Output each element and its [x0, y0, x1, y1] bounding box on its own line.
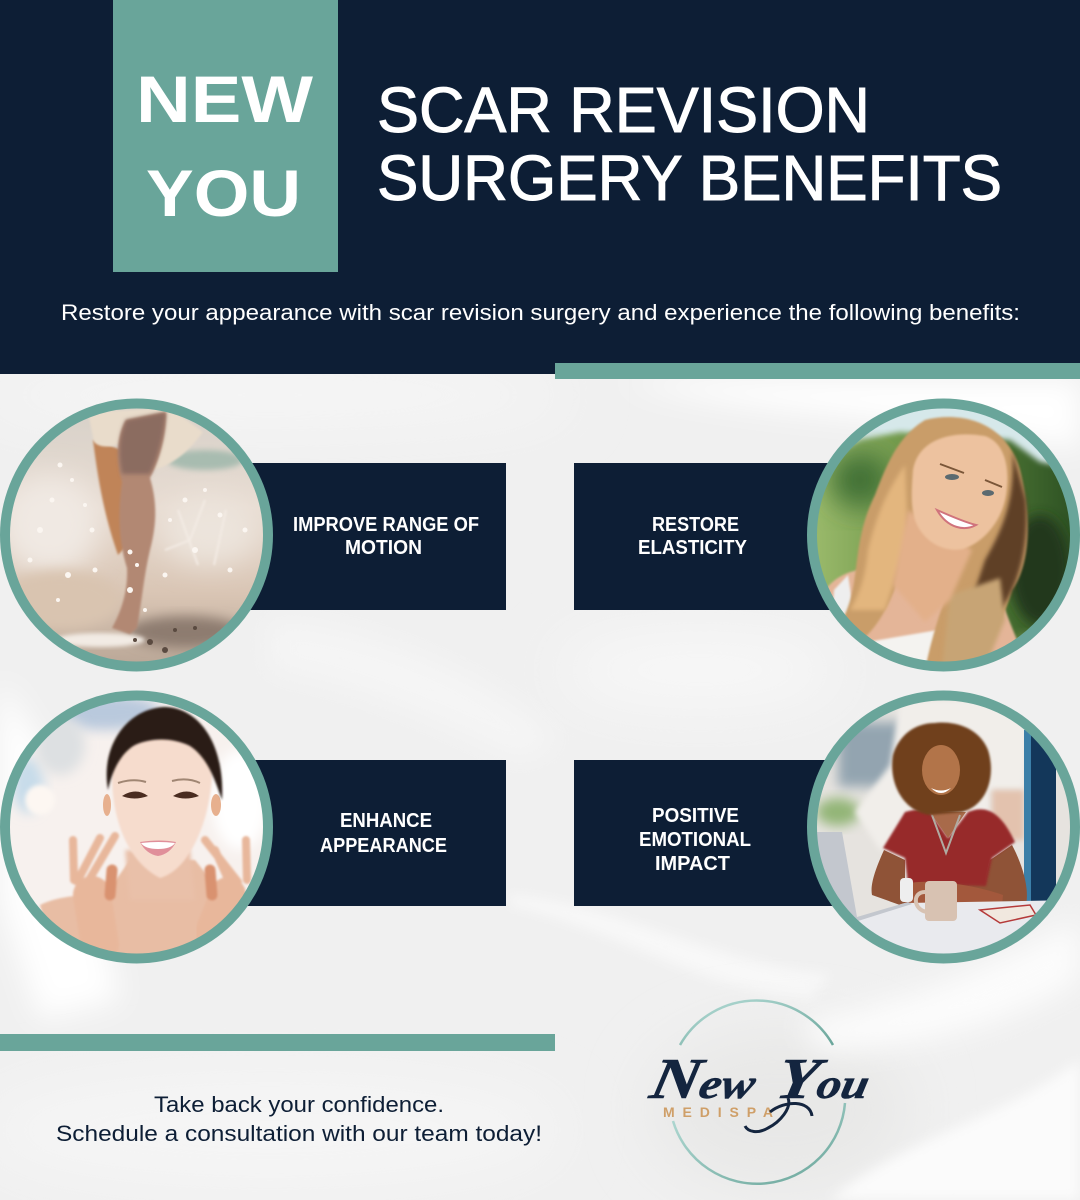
- face: [912, 434, 1007, 550]
- brand box: [113, 0, 338, 272]
- hair mass: [842, 417, 1028, 672]
- call to action text: Schedule a consultation with our team today!: [56, 1121, 542, 1146]
- notebook: [980, 905, 1036, 923]
- silk background: [0, 365, 1080, 1200]
- call to action text: [56, 1092, 542, 1146]
- hair: [107, 707, 222, 800]
- panel: restore elasticity: ELASTICITY: [638, 537, 748, 559]
- curly hair: [892, 723, 991, 815]
- photo: legs splashing on beach: [0, 400, 274, 670]
- call to action text: Take back your confidence.: [154, 1092, 444, 1117]
- arms: [872, 845, 1027, 905]
- panel: positive emotional impact: IMPACT: [655, 853, 730, 875]
- panel: enhance appearance: [240, 760, 506, 906]
- photo: smiling woman with long blonde hair: [810, 400, 1080, 672]
- logo: New You Medispa: New: [644, 1047, 764, 1111]
- laptop: [817, 832, 912, 922]
- brand box: YOU: [146, 156, 301, 230]
- shoulders and chest: [828, 570, 1018, 654]
- panel: enhance appearance: ENHANCE: [340, 810, 432, 832]
- face: [112, 738, 212, 878]
- dress: [90, 409, 202, 466]
- panel: positive emotional impact: POSITIVE: [652, 805, 739, 827]
- neck: [893, 510, 972, 622]
- panel: improve range of motion: MOTION: [345, 537, 422, 559]
- bottom accent bar: [0, 1034, 555, 1051]
- panel: restore elasticity: RESTORE: [652, 514, 739, 536]
- title: [377, 74, 1002, 214]
- back leg: [92, 440, 124, 556]
- panel: enhance appearance: APPEARANCE: [320, 835, 447, 857]
- brand box: NEW: [136, 62, 314, 136]
- header band: [0, 0, 1080, 374]
- photo: woman touching her face: [0, 690, 274, 975]
- right hand: [205, 840, 247, 940]
- top accent bar: [555, 363, 1080, 379]
- table: [859, 900, 1046, 954]
- panel: positive emotional impact: EMOTIONAL: [639, 829, 751, 851]
- title: SCAR REVISION: [377, 74, 870, 146]
- left hand: [73, 836, 115, 945]
- hands: [905, 882, 1003, 903]
- neck: [123, 848, 194, 866]
- panel: positive emotional impact: [574, 760, 840, 906]
- logo: New You Medispa: [644, 1000, 877, 1184]
- shoulders: [39, 858, 208, 954]
- photo: woman at a desk with coffee: [810, 690, 1080, 970]
- panel: improve range of motion: [240, 463, 506, 610]
- white top: [832, 574, 852, 615]
- panel: improve range of motion: IMPROVE RANGE OF: [293, 514, 479, 536]
- panel: restore elasticity: [574, 463, 840, 610]
- logo: New You Medispa: MEDISPA: [663, 1104, 773, 1120]
- front leg: [112, 412, 166, 634]
- logo: New You Medispa: You: [771, 1047, 877, 1111]
- intro text: Restore your appearance with scar revision surgery and experience the following benefits:: [61, 300, 1020, 325]
- mug: [925, 881, 957, 921]
- title: SURGERY BENEFITS: [377, 142, 1002, 214]
- shirt: [883, 809, 1015, 886]
